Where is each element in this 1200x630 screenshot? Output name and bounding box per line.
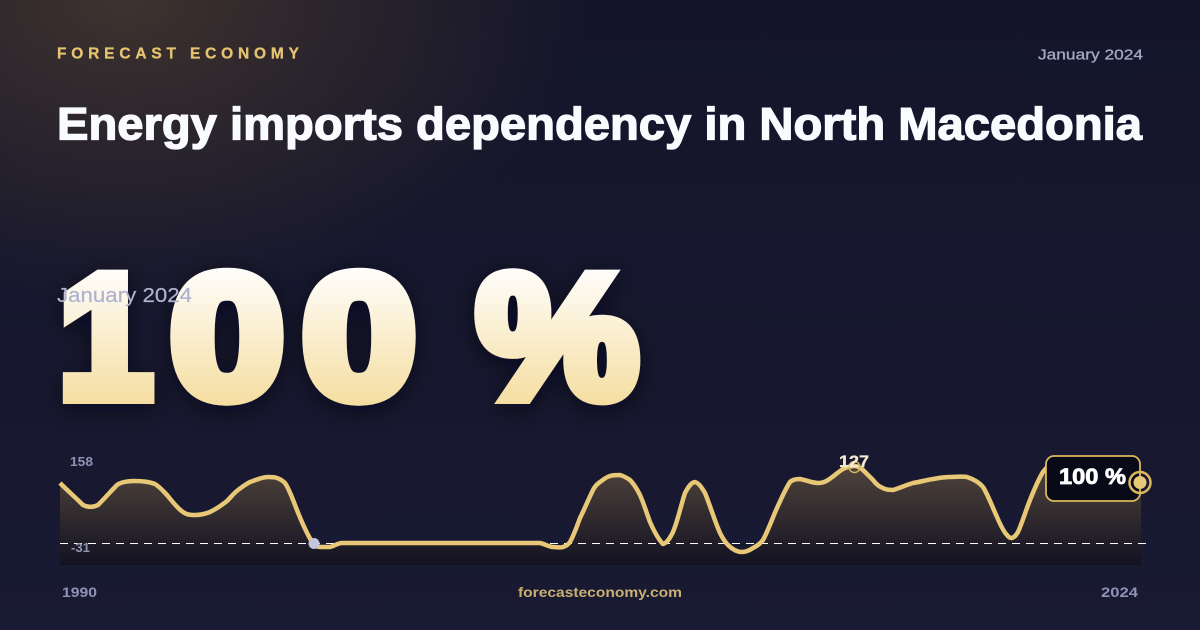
minimum point marker bbox=[308, 538, 320, 549]
source url: forecasteconomy.com bbox=[518, 584, 682, 600]
peak value: 127 bbox=[839, 453, 869, 471]
date top right: January 2024 bbox=[1038, 46, 1143, 64]
chart line bbox=[60, 466, 1048, 552]
big value: 0 bbox=[302, 240, 416, 435]
big value bbox=[59, 239, 638, 435]
date overlay: January 2024 bbox=[57, 285, 192, 307]
y axis min: -31 bbox=[71, 540, 90, 555]
area line chart bbox=[60, 453, 1150, 565]
big value: % bbox=[477, 239, 638, 434]
big value: 1 bbox=[59, 240, 152, 435]
x axis end: 2024 bbox=[1101, 584, 1138, 600]
current value callout bbox=[1046, 456, 1140, 501]
brand label: FORECAST ECONOMY bbox=[57, 46, 300, 62]
peak marker bbox=[849, 462, 860, 472]
current point marker bbox=[1130, 472, 1150, 493]
chart area fill bbox=[60, 466, 1141, 565]
x axis start: 1990 bbox=[62, 584, 97, 600]
big value: 0 bbox=[170, 240, 284, 435]
y axis max: 158 bbox=[70, 454, 93, 469]
title: Energy imports dependency in North Macedonia bbox=[57, 98, 1143, 150]
baseline dashed bbox=[60, 542, 1147, 544]
current value callout: 100 % bbox=[1059, 464, 1126, 489]
